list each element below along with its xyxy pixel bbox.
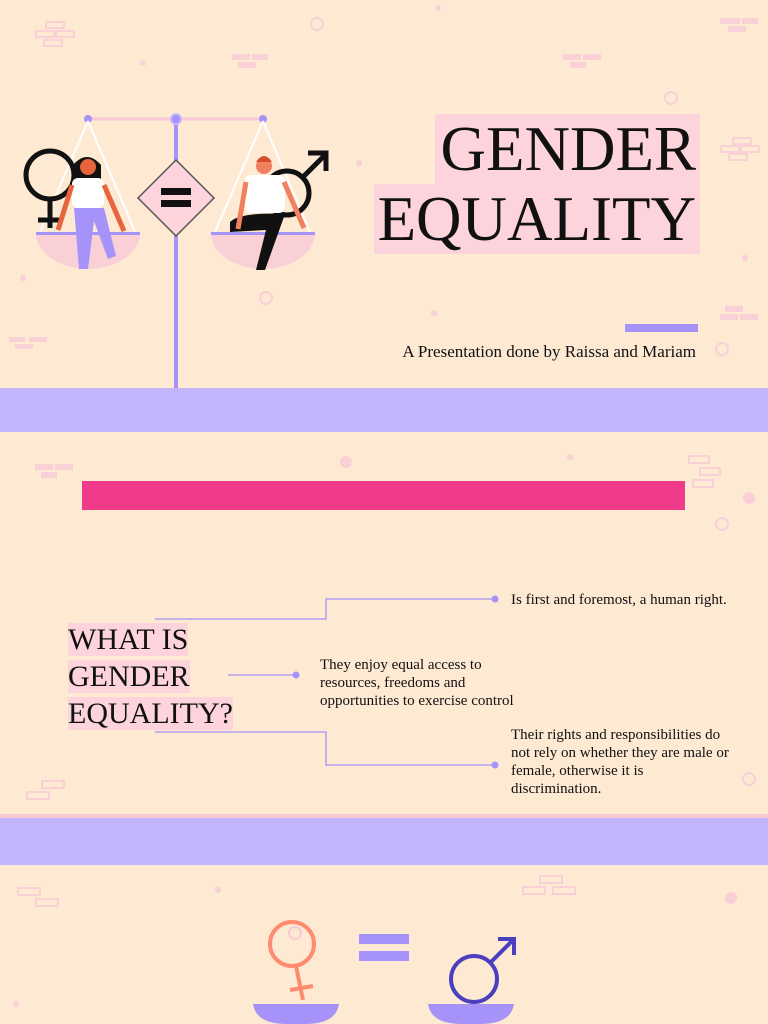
bottom symbols bbox=[253, 920, 516, 1024]
accent bar bbox=[625, 324, 698, 332]
man bbox=[256, 158, 272, 174]
heading: what is gender equality: WHAT IS bbox=[68, 623, 188, 656]
text: rights and responsibilities: female, otherwise it is bbox=[511, 763, 643, 779]
pink bar bbox=[82, 481, 685, 510]
title bbox=[374, 114, 700, 254]
purple band bottom bbox=[0, 814, 768, 865]
heading: what is gender equality: EQUALITY? bbox=[68, 697, 233, 730]
text: human right: Is first and foremost, a human right. bbox=[511, 592, 727, 608]
heading: what is gender equality bbox=[68, 623, 233, 730]
icon: equal diamond bbox=[138, 160, 214, 236]
illustration: balance scale bbox=[24, 113, 328, 388]
heading: what is gender equality: GENDER bbox=[68, 660, 190, 693]
text: equal access: opportunities to exercise control bbox=[320, 693, 514, 709]
text: rights and responsibilities: not rely on whether they are male or bbox=[511, 745, 729, 761]
title: EQUALITY bbox=[378, 184, 696, 254]
pans bbox=[36, 233, 140, 269]
subtitle: A Presentation done by Raissa and Mariam bbox=[402, 342, 696, 361]
text: equal access: They enjoy equal access to bbox=[320, 657, 482, 673]
icon: female symbol bbox=[26, 151, 74, 228]
text: rights and responsibilities bbox=[511, 727, 729, 797]
purple band top bbox=[0, 388, 768, 432]
title: GENDER bbox=[441, 114, 696, 184]
text: rights and responsibilities: discrimination. bbox=[511, 781, 601, 797]
text: equal access bbox=[320, 657, 514, 709]
woman bbox=[73, 157, 101, 180]
icon: male symbol bbox=[265, 153, 326, 215]
text: equal access: resources, freedoms and bbox=[320, 675, 465, 691]
text: rights and responsibilities: Their rights and responsibilities do bbox=[511, 727, 720, 743]
